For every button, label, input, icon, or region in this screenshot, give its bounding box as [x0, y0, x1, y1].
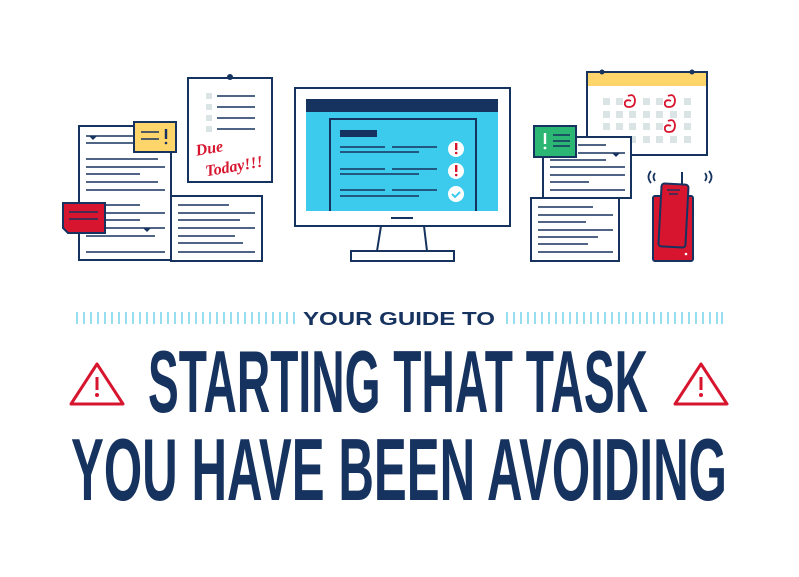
title [71, 332, 727, 519]
sticky note: yellow [134, 122, 176, 152]
handwriting: Due Today!!!: Due [193, 138, 224, 160]
subtitle: YOUR GUIDE TO with tick rules: YOUR GUIDE TO [303, 309, 495, 329]
icon: cordless phone [648, 171, 712, 261]
handwriting: Due Today!!! [193, 132, 264, 182]
icon: alert circle [448, 141, 464, 157]
sticky note: green [534, 126, 576, 157]
handwriting: Due Today!!!: Today!!! [204, 154, 264, 180]
calendar [587, 70, 707, 155]
illustration: computer monitor [295, 88, 510, 261]
clipboard: due today [188, 74, 272, 182]
icon: warning triangle right [675, 364, 727, 404]
sticky note: red [63, 203, 105, 233]
document: lower right [531, 198, 619, 261]
icon: check circle [448, 186, 464, 202]
illustration: right cluster [531, 70, 712, 261]
document: long left page [79, 126, 171, 260]
subtitle: YOUR GUIDE TO with tick rules [77, 309, 722, 329]
icon: alert circle 2 [448, 163, 464, 179]
icon: warning triangle left [71, 364, 123, 404]
document: upper right [543, 137, 631, 198]
illustration: left documents cluster [63, 74, 272, 261]
document: lower right page [171, 196, 262, 261]
